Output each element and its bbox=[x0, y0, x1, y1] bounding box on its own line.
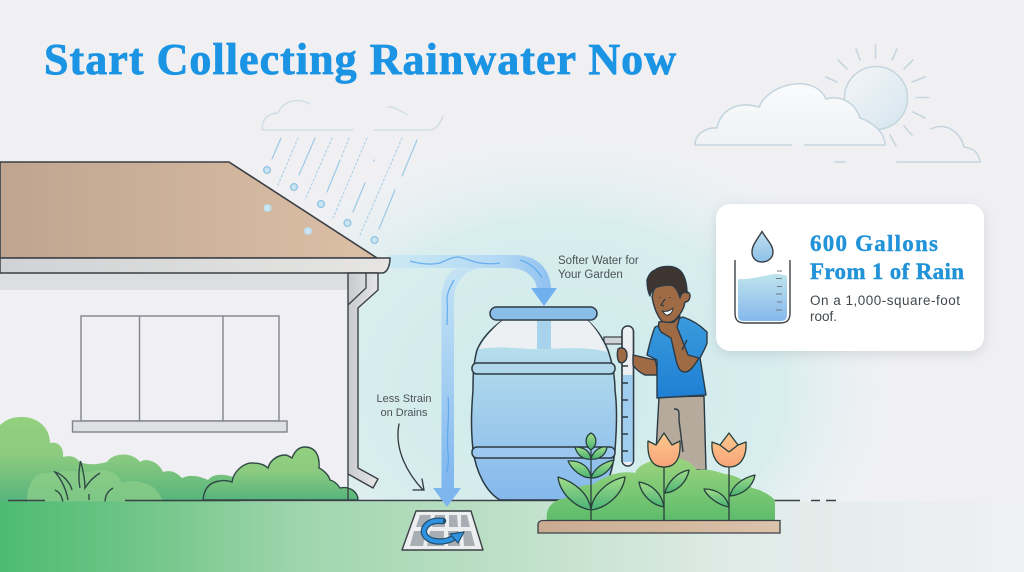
bed planter bbox=[538, 520, 780, 533]
downspout inner line bbox=[348, 273, 366, 500]
water flow pipe bbox=[388, 255, 557, 507]
drain frame bbox=[402, 511, 483, 550]
icon: grass tuft bbox=[55, 461, 113, 503]
rain streaks solid bbox=[272, 138, 417, 229]
empty top bbox=[479, 320, 607, 352]
callout card: roof. bbox=[810, 309, 837, 324]
storm drain bbox=[402, 511, 483, 550]
gauge pipe connector bbox=[604, 337, 624, 344]
icon: sun and clouds bbox=[695, 45, 980, 162]
label: softer water bbox=[558, 255, 639, 281]
rain streaks dotted bbox=[278, 138, 402, 235]
callout card bbox=[716, 204, 984, 351]
arrow into barrel bbox=[531, 288, 557, 306]
beaker ticks bbox=[776, 271, 782, 310]
icon: tulip one bbox=[639, 433, 689, 520]
icon: swirl arrow bbox=[424, 521, 464, 543]
title: Start Collecting Rainwater Now bbox=[44, 35, 676, 84]
garden bush bbox=[547, 458, 775, 521]
water gauge bbox=[622, 326, 634, 466]
arrow: to drain bbox=[398, 424, 424, 490]
label: softer water: Your Garden bbox=[558, 269, 623, 281]
background bush bbox=[0, 417, 240, 502]
house wall bbox=[0, 273, 348, 501]
bushes left bbox=[0, 417, 358, 503]
lighter foreground bush bbox=[27, 470, 163, 502]
card heading: 600 Gallons bbox=[810, 231, 938, 256]
callout card: From 1 of Rain bbox=[810, 259, 964, 284]
ground bbox=[0, 502, 1024, 572]
large cloud outline bbox=[695, 84, 885, 145]
label: less strain bbox=[376, 393, 432, 419]
near hand on gauge bbox=[617, 348, 627, 363]
head bbox=[652, 285, 690, 323]
pipe to drain bbox=[442, 268, 480, 490]
window sill bbox=[72, 421, 287, 432]
outlined bush bbox=[203, 447, 358, 500]
face bbox=[660, 297, 670, 306]
near arm bbox=[633, 355, 657, 375]
card text: On a 1,000-square-foot bbox=[810, 293, 960, 308]
upper band bbox=[472, 363, 615, 374]
roof raindrops bbox=[264, 167, 378, 243]
icon: large cloud bbox=[695, 84, 885, 145]
label: less strain: on Drains bbox=[380, 407, 428, 419]
label: less strain: Less Strain bbox=[376, 393, 432, 405]
sun rays bbox=[826, 45, 929, 146]
barrel body bbox=[472, 320, 616, 500]
drain grate cells bbox=[410, 515, 475, 546]
beaker outline bbox=[735, 260, 790, 323]
inflow stream bbox=[537, 320, 551, 349]
barrel lid bbox=[490, 307, 597, 320]
window bbox=[72, 316, 287, 432]
lower band bbox=[472, 447, 615, 458]
icon: leafy plant bbox=[558, 433, 625, 520]
shirt bbox=[647, 317, 707, 398]
water drop bbox=[752, 232, 773, 262]
icon: tulip two bbox=[704, 433, 755, 520]
downspout bbox=[348, 273, 378, 488]
gutter fascia bbox=[0, 258, 390, 273]
beaker water bbox=[738, 274, 787, 321]
rain barrel bbox=[472, 307, 616, 500]
label: softer water: Softer Water for bbox=[558, 255, 639, 267]
person bbox=[617, 266, 707, 470]
rain cloud outline bbox=[262, 101, 443, 130]
roof bbox=[0, 162, 377, 258]
flow lines bbox=[410, 257, 542, 472]
icon: beaker with water drop bbox=[735, 232, 790, 323]
horizontal flow bbox=[388, 255, 551, 290]
eave shadow bbox=[0, 273, 348, 290]
gauge ticks bbox=[622, 366, 628, 451]
arrow into drain bbox=[433, 488, 461, 507]
trousers bbox=[655, 396, 706, 470]
sleeve crease bbox=[682, 340, 687, 350]
forearm and hand bbox=[659, 316, 699, 372]
smile bbox=[662, 308, 673, 315]
icon: rain cloud and rain bbox=[262, 101, 443, 235]
garden bed bbox=[538, 433, 780, 533]
icon: small cloud bbox=[835, 127, 980, 162]
ground line bbox=[8, 500, 836, 502]
hair bbox=[647, 266, 687, 298]
icon: sun bbox=[844, 66, 908, 130]
